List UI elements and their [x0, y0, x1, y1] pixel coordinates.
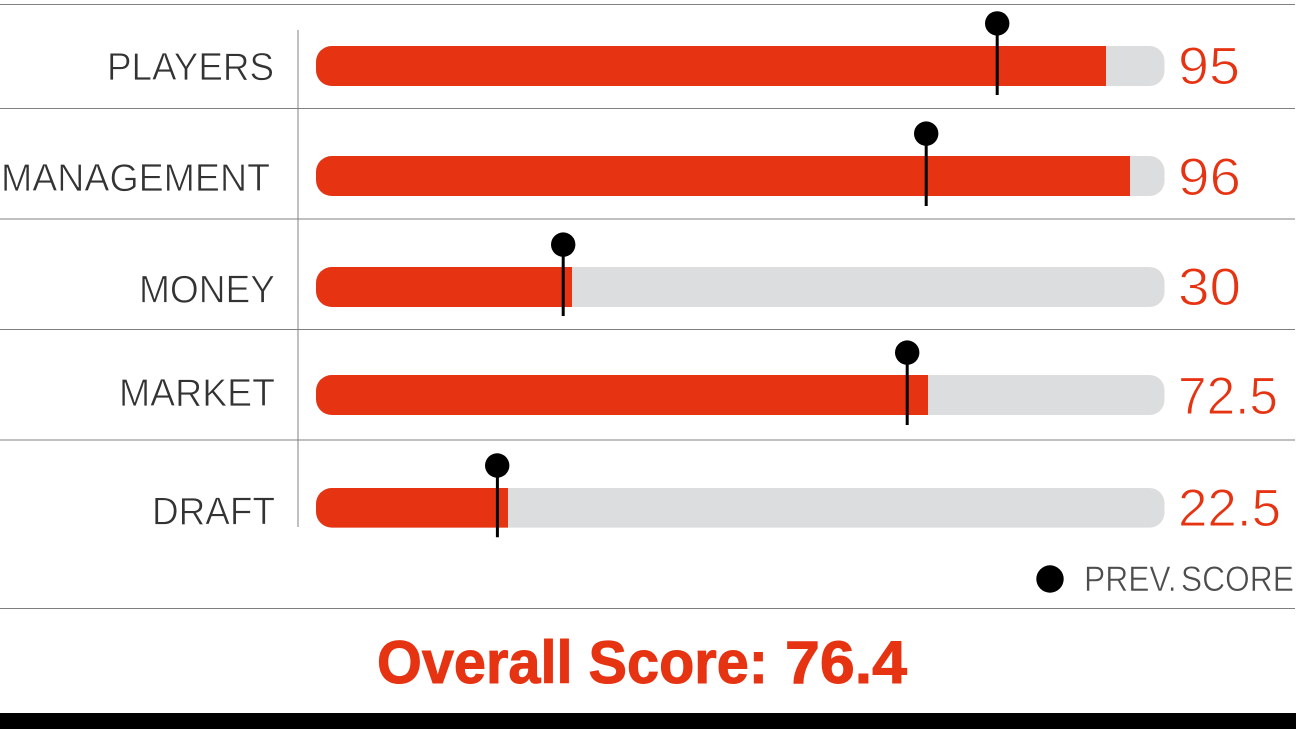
marker: market previous score [895, 340, 919, 425]
value: market: 72.5 [1178, 367, 1278, 426]
value: players: 95 [1178, 37, 1240, 96]
value: money: 30 [1178, 258, 1241, 317]
row: management [1, 121, 1241, 207]
value: management: 96 [1178, 148, 1241, 207]
bottom black band [0, 713, 1296, 729]
row: players [107, 11, 1240, 96]
bar: management track [316, 156, 1164, 196]
value: draft: 22.5 [1178, 479, 1281, 538]
label: management: MANAGEMENT [1, 157, 270, 200]
label: market: MARKET [119, 372, 275, 415]
row: money [139, 232, 1241, 317]
bar: market track [316, 375, 1164, 415]
marker: players previous score [985, 11, 1009, 95]
bar: money track [316, 267, 1164, 307]
bar: management score [316, 156, 1130, 196]
bar: draft track [316, 488, 1164, 528]
marker: draft previous score [485, 453, 509, 537]
marker: money previous score [551, 232, 575, 316]
row: draft [152, 453, 1281, 538]
overall score: Overall Score: [377, 629, 768, 696]
label: draft: DRAFT [152, 490, 275, 534]
overall score: 76.4 [785, 629, 908, 696]
bar: market score [316, 375, 928, 415]
row: market [119, 340, 1278, 426]
label: players: PLAYERS [107, 46, 274, 89]
bar: players track [316, 46, 1164, 86]
bar: players score [316, 46, 1106, 86]
label: money: MONEY [139, 268, 275, 312]
marker: management previous score [914, 121, 938, 206]
bar: draft score [316, 488, 508, 528]
bar: money score [316, 267, 572, 307]
